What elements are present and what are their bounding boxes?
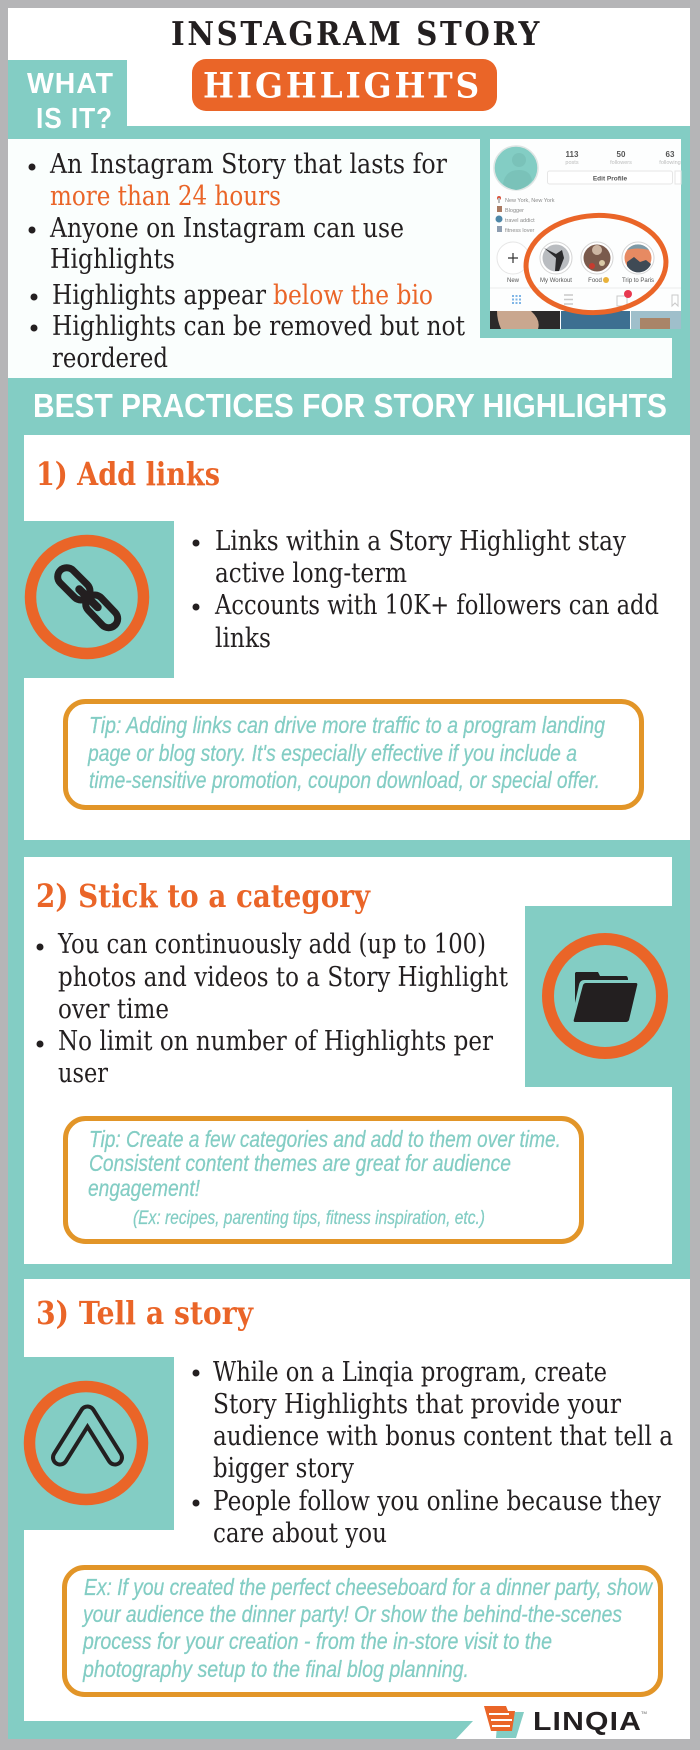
highlight: new (497, 242, 529, 284)
bullet list: definition: An Instagram Story that lasts for (49, 149, 447, 180)
title: Instagram Story: INSTAGRAM STORY (171, 14, 542, 53)
profile stats: following (659, 160, 681, 166)
bullet list: category: user (58, 1058, 108, 1089)
icon tile: link (24, 521, 174, 678)
callout: category tip (66, 1118, 582, 1242)
panel: what is it text (8, 139, 672, 378)
bullet list: links: links (215, 623, 271, 654)
panel: 2) stick to a category (24, 857, 690, 1264)
bullet list: story: Story Highlights that provide your (213, 1389, 621, 1420)
callout: category tip: engagement! (88, 1175, 201, 1201)
highlight: food (581, 242, 613, 284)
heading: stick to a category: 2) Stick to a category (36, 877, 371, 915)
bullet list: story: While on a Linqia program, create (213, 1357, 607, 1388)
heading tab: What is it? (8, 60, 127, 135)
bullet list: definition (28, 149, 465, 374)
edit profile button: Edit Profile (593, 176, 628, 182)
bullet list: definition: more than 24 hours (50, 181, 281, 212)
bio lines: Blogger (505, 208, 524, 214)
bullet list: story: care about you (213, 1518, 387, 1549)
title badge: Highlights: HIGHLIGHTS (203, 66, 482, 106)
bio lines (496, 196, 555, 234)
profile stats (565, 150, 681, 166)
icon tile: folder (525, 906, 690, 1087)
bullet list: definition: below the bio (273, 280, 433, 311)
highlight: trip to paris: Trip to Paris (622, 278, 654, 284)
panel: 3) tell a story (24, 1279, 690, 1739)
bullet list: definition: Anyone on Instagram can use (49, 213, 404, 244)
bullet list: category: over time (58, 994, 169, 1025)
callout: category tip: Tip: Create a few categories and add to them over time. (89, 1126, 561, 1152)
avatar (494, 146, 538, 190)
screenshot: Instagram profile with highlights circled (490, 139, 681, 329)
tab bar icons (490, 288, 681, 306)
bio lines: New York, New York (505, 198, 555, 204)
heading tab: What is it?: IS IT? (36, 103, 113, 135)
header panel (8, 8, 690, 126)
bullet list: story (192, 1357, 673, 1549)
bullet list: definition: reordered (52, 343, 168, 374)
callout: story example (64, 1568, 660, 1694)
highlight: new: New (507, 278, 520, 284)
bullet list: category: photos and videos to a Story Highlight (58, 962, 508, 993)
bullet list: category (36, 929, 508, 1089)
orange highlight ring (524, 212, 668, 316)
photo grid strip (490, 311, 681, 329)
panel: 1) add links (24, 435, 690, 840)
bullet list: definition: Highlights (50, 244, 175, 275)
logo: Linqia (484, 1706, 647, 1738)
callout: story example: photography setup to the final blog planning. (82, 1656, 469, 1682)
callout: category tip: Consistent content themes are great for audience (89, 1150, 511, 1176)
bullet list: definition: Highlights appear (52, 280, 266, 311)
heading tab: What is it?: WHAT (27, 68, 114, 100)
callout: category tip: (Ex: recipes, parenting tips, fitness inspiration, etc.) (133, 1208, 485, 1229)
bullet list: links: active long-term (215, 558, 407, 589)
profile stats: followers (610, 160, 632, 166)
bullet list: definition: Highlights can be removed but not (52, 311, 465, 342)
callout: links tip: page or blog story. It's especially effective if you include a (87, 740, 577, 766)
icon tile: chevron (24, 1357, 174, 1530)
bio lines: travel addict (505, 218, 535, 224)
highlight: food: Food (588, 278, 602, 284)
callout: story example: process for your creation - from the in-store visit to the (82, 1628, 552, 1654)
bio lines: fitness lover (505, 228, 535, 234)
highlight: my workout: My Workout (540, 278, 572, 284)
bullet list: links: Links within a Story Highlight stay (215, 526, 627, 557)
logo: Linqia: TM (641, 1710, 647, 1715)
profile stats: 113 (566, 150, 579, 159)
bullet list: category: No limit on number of Highlights per (58, 1026, 493, 1057)
heading: add links: 1) Add links (36, 455, 220, 493)
callout: links tip: Tip: Adding links can drive more traffic to a program landing (89, 712, 605, 738)
profile stats: posts (565, 160, 579, 166)
profile stats: 50 (617, 150, 626, 159)
profile stats: 63 (666, 150, 675, 159)
callout: links tip: time-sensitive promotion, coupon download, or special offer. (89, 767, 600, 793)
bullet list: links (192, 526, 659, 654)
callout: links tip (66, 702, 642, 808)
highlight: trip to paris (622, 242, 654, 284)
logo: Linqia: LINQIA (533, 1706, 642, 1736)
heading: tell a story: 3) Tell a story (36, 1294, 254, 1332)
bullet list: story: bigger story (213, 1453, 355, 1484)
edit profile button (548, 171, 681, 184)
highlight: my workout (540, 242, 572, 284)
bullet list: category: You can continuously add (up to 100) (57, 929, 486, 960)
